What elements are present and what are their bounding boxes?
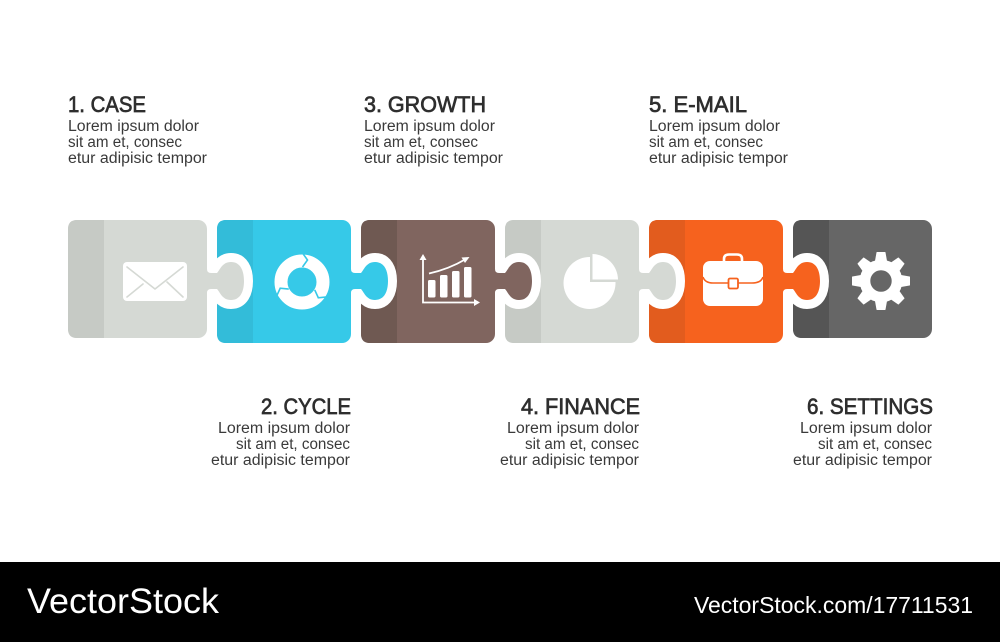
panel: 4 finance piece: [505, 220, 676, 343]
text block: 6. SETTINGS: 6. SETTINGS: [807, 394, 933, 419]
text block: 3. GROWTH: [364, 92, 503, 167]
text block: 6. SETTINGS: sit am et, consec: [818, 436, 932, 453]
panel: 6 settings piece: [793, 220, 932, 338]
text block: 3. GROWTH: Lorem ipsum dolor: [364, 118, 495, 135]
panel: 1 case piece: [68, 220, 244, 338]
icon: cycle arrows: [274, 253, 327, 303]
icon: gear: [852, 252, 910, 310]
text block: 2. CYCLE: 2. CYCLE: [261, 394, 351, 419]
text block: 5. E-MAIL: [649, 92, 788, 167]
text block: 3. GROWTH: 3. GROWTH: [364, 92, 486, 117]
text block: 1. CASE: etur adipisic tempor: [68, 150, 207, 167]
text block: 4. FINANCE: etur adipisic tempor: [500, 452, 639, 469]
text block: 4. FINANCE: Lorem ipsum dolor: [507, 420, 639, 437]
text block: 3. GROWTH: sit am et, consec: [364, 134, 478, 151]
text block: 5. E-MAIL: sit am et, consec: [649, 134, 763, 151]
text block: 6. SETTINGS: etur adipisic tempor: [793, 452, 932, 469]
icon: pie chart: [564, 254, 618, 309]
footer image id: VectorStock.com/17711531: [694, 592, 973, 618]
text block: 4. FINANCE: [500, 394, 640, 469]
text block: 5. E-MAIL: Lorem ipsum dolor: [649, 118, 780, 135]
panel: 5 e-mail piece: [649, 220, 820, 343]
footer band: [0, 562, 1000, 642]
text block: 2. CYCLE: etur adipisic tempor: [211, 452, 350, 469]
icon: briefcase: [703, 254, 763, 306]
text block: 6. SETTINGS: Lorem ipsum dolor: [800, 420, 932, 437]
panel: 3 growth piece: [361, 220, 532, 343]
text block: 2. CYCLE: sit am et, consec: [236, 436, 350, 453]
text block: 5. E-MAIL: 5. E-MAIL: [649, 92, 747, 117]
text block: 2. CYCLE: [211, 394, 351, 469]
text block: 2. CYCLE: Lorem ipsum dolor: [218, 420, 350, 437]
icon: growth chart: [420, 254, 480, 306]
text block: 5. E-MAIL: etur adipisic tempor: [649, 150, 788, 167]
text block: 4. FINANCE: 4. FINANCE: [521, 394, 640, 419]
text block: 1. CASE: [68, 92, 207, 167]
icon: envelope: [123, 262, 187, 301]
text block: 1. CASE: 1. CASE: [68, 92, 146, 117]
text block: 4. FINANCE: sit am et, consec: [525, 436, 639, 453]
panel: 2 cycle piece: [217, 220, 388, 343]
text block: 3. GROWTH: etur adipisic tempor: [364, 150, 503, 167]
text block: 1. CASE: Lorem ipsum dolor: [68, 118, 199, 135]
text block: 6. SETTINGS: [793, 394, 933, 469]
footer logo text: VectorStock: [27, 582, 220, 621]
text block: 1. CASE: sit am et, consec: [68, 134, 182, 151]
